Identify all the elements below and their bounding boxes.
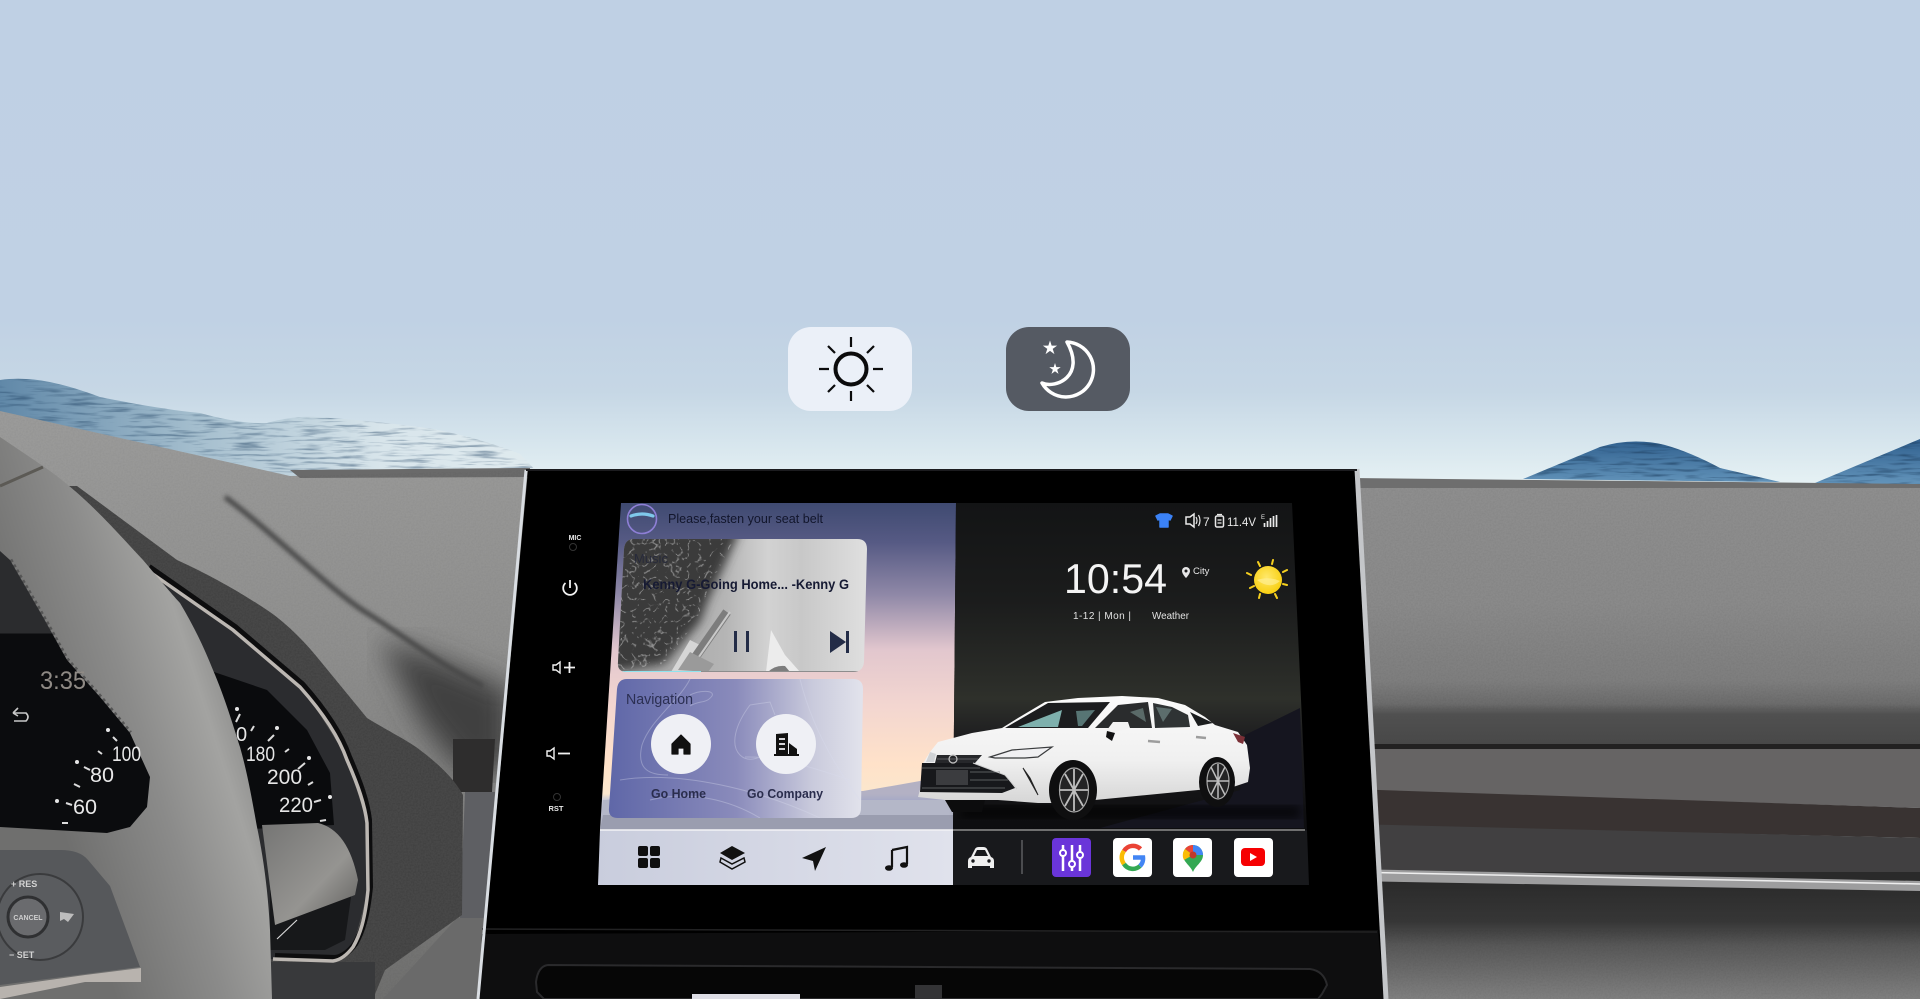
seat belt message: Please,fasten your seat belt	[668, 511, 823, 526]
grille	[935, 755, 982, 763]
music card: Music	[634, 551, 668, 566]
bezel chrome edges	[478, 469, 1386, 999]
status bar	[1156, 514, 1276, 529]
left display: 80	[90, 764, 114, 787]
night mode panel	[953, 503, 1307, 830]
date line: 1-12 | Mon |	[1073, 611, 1131, 622]
go home button: Go Home	[651, 786, 706, 801]
speed readouts: 220	[279, 794, 313, 817]
car body	[918, 696, 1250, 803]
next button	[830, 631, 849, 653]
bottom bar night side	[953, 830, 1309, 885]
left display: 3:35	[40, 667, 86, 695]
dashboard right section	[1350, 478, 1920, 999]
status bar: 11.4V	[1227, 515, 1256, 529]
status bar: E	[1261, 515, 1265, 521]
headlight	[990, 747, 1052, 758]
speed readouts: 0	[236, 724, 247, 746]
navigation card	[609, 679, 863, 818]
speed readouts: 180	[246, 743, 275, 766]
go company button	[747, 714, 824, 801]
side control labels	[547, 535, 581, 813]
air vent	[536, 965, 1327, 999]
speed readouts	[235, 707, 332, 821]
instrument cluster hood	[0, 486, 463, 999]
weather label: Weather	[1152, 611, 1190, 622]
status bar: 7	[1203, 515, 1210, 529]
mirror	[1107, 722, 1130, 740]
side control labels: MIC	[569, 535, 581, 542]
cruise control buttons: + RES	[11, 879, 37, 889]
navigation heading: Navigation	[626, 692, 693, 708]
steering wheel	[0, 437, 272, 999]
instrument cluster dial	[0, 470, 370, 961]
go home button	[651, 714, 711, 801]
icon: youtube tile	[1234, 838, 1273, 877]
icon: apps grid	[638, 846, 660, 868]
icon: layers	[720, 846, 745, 869]
location: City	[1193, 566, 1210, 577]
icon: sun	[819, 337, 883, 401]
steering column stalk	[262, 823, 358, 925]
windows	[1005, 702, 1213, 728]
wheels	[1049, 757, 1235, 820]
bottom bar day side	[598, 830, 953, 885]
icon: moon and stars	[1042, 340, 1093, 397]
music card: Kenny G-Going Home... -Kenny G	[643, 576, 849, 592]
clock: 10:54	[1064, 555, 1167, 602]
door handles	[1148, 737, 1206, 742]
speed readouts: 200	[267, 766, 302, 789]
left display: 60	[73, 796, 97, 819]
assistant orb	[628, 504, 656, 534]
day mode panel	[598, 327, 1309, 885]
night mode toggle	[1006, 327, 1130, 411]
icon: google tile	[1113, 838, 1152, 877]
chrome trim	[0, 968, 141, 999]
music card	[618, 539, 867, 672]
left display	[0, 551, 150, 833]
snowy mountains left	[0, 379, 545, 480]
cruise control buttons: − SET	[9, 950, 35, 960]
taillight	[1233, 733, 1245, 744]
dashboard left section	[0, 411, 530, 999]
icon: navigation arrow	[802, 847, 826, 871]
pause button	[736, 631, 748, 652]
left display: 100	[112, 743, 141, 766]
side control labels: RST	[548, 804, 564, 813]
day mode toggle	[788, 327, 912, 411]
blue mountains right	[1523, 439, 1920, 490]
icon: maps tile	[1173, 838, 1212, 877]
cruise control buttons: CANCEL	[13, 915, 43, 922]
under bumper	[945, 800, 985, 812]
icon: car	[968, 847, 994, 868]
head unit bezel	[478, 469, 1386, 999]
car illustration	[918, 696, 1300, 820]
location	[1182, 566, 1210, 578]
cruise control buttons	[0, 874, 83, 960]
icon: sun weather	[1247, 560, 1287, 598]
icon: music note	[885, 847, 908, 871]
go company button: Go Company	[747, 786, 824, 801]
wheel hub	[0, 850, 140, 985]
icon: equalizer tile	[1052, 838, 1091, 877]
clothing icon	[1156, 514, 1172, 527]
